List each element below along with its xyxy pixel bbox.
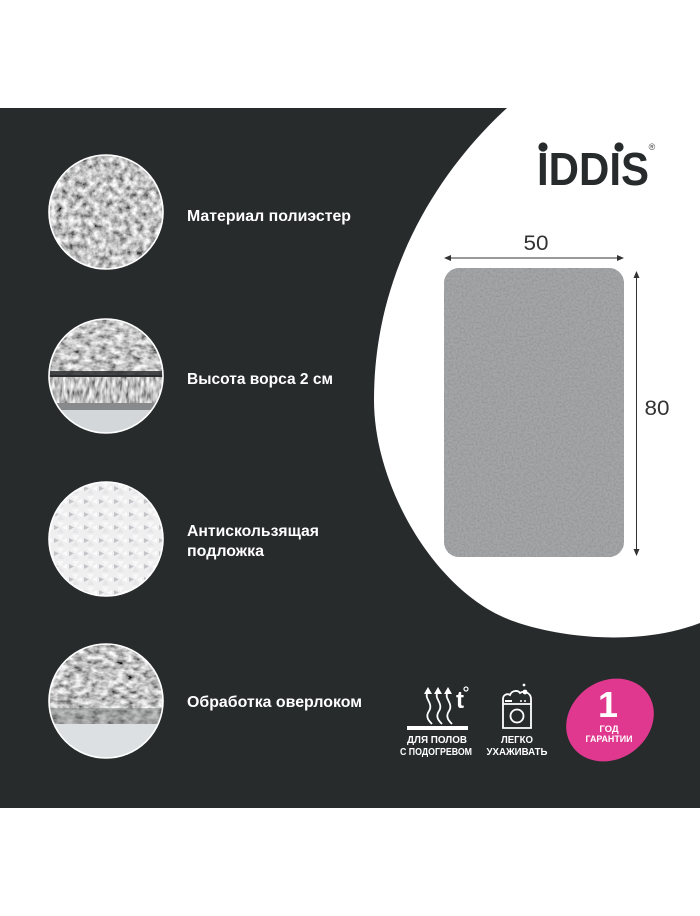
width dimension arrow: 50: 50 <box>524 232 548 255</box>
dark background panel <box>0 108 700 808</box>
icon: heated floor <box>407 687 468 730</box>
text: anti-slip backing: Антискользящая <box>187 523 319 540</box>
bath mat product <box>444 268 624 557</box>
text: easy care <box>486 735 548 758</box>
text: for heated floors <box>400 735 472 758</box>
text: pile height: Высота ворса 2 см <box>187 371 333 388</box>
text: anti-slip backing: подложка <box>187 543 264 560</box>
logo: IDDIS: ® <box>649 142 656 152</box>
text: overlock: Обработка оверлоком <box>187 694 362 711</box>
circle photo: overlock edge <box>49 644 163 760</box>
text: easy care: ЛЕГКО <box>501 735 533 746</box>
text: easy care: УХАЖИВАТЬ <box>486 747 548 758</box>
text: for heated floors: ДЛЯ ПОЛОВ <box>407 735 467 746</box>
badge: 1 year warranty: ГАРАНТИИ <box>586 734 633 745</box>
white curved area <box>374 108 700 637</box>
height dimension arrow: 80: 80 <box>644 397 670 420</box>
circle photo: shaggy polyester <box>49 155 163 269</box>
text: for heated floors: С ПОДОГРЕВОМ <box>400 747 472 758</box>
icon: heated floor: t <box>456 687 464 714</box>
width dimension arrow: 50 <box>444 232 624 261</box>
text: anti-slip backing <box>187 523 319 560</box>
height dimension arrow: 80 <box>634 271 670 556</box>
badge: 1 year warranty <box>550 662 670 778</box>
icon: washing machine <box>503 684 531 728</box>
circle photo: anti-slip backing <box>49 482 163 596</box>
circle photo: pile height cross-section <box>49 319 163 435</box>
badge: 1 year warranty: 1 <box>598 684 618 725</box>
logo: IDDIS: IDDIS <box>537 143 649 195</box>
badge: 1 year warranty: ГОД <box>599 724 619 735</box>
text: material: Материал полиэстер <box>187 208 351 225</box>
